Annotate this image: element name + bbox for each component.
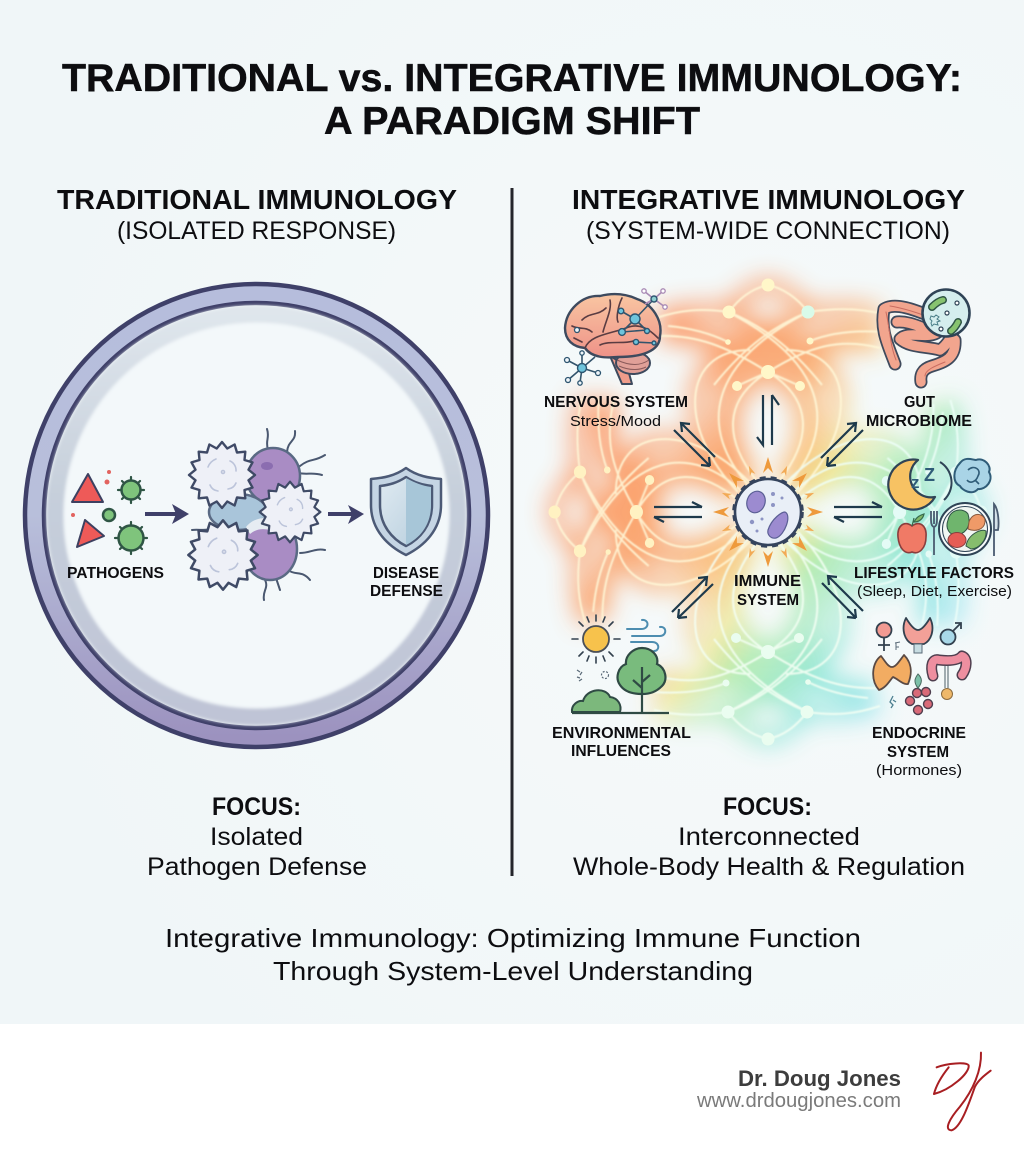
icon: lifestyle factors — [888, 459, 999, 556]
footer credit: www.drdougjones.com — [696, 1090, 901, 1112]
label: environmental influences — [552, 725, 691, 760]
text block: conclusion: Integrative Immunology: Optimizing Immune Function — [165, 923, 861, 953]
label: endocrine system: (Hormones) — [876, 762, 962, 779]
text block: left focus — [147, 793, 367, 881]
icon: pathogens — [71, 470, 147, 554]
label: disease defense: DEFENSE — [370, 583, 443, 600]
text block: conclusion: Through System-Level Understanding — [273, 956, 753, 986]
label: immune system — [734, 573, 801, 609]
text block: right focus: Interconnected — [678, 823, 860, 851]
icon: endocrine system — [873, 618, 966, 714]
arrow: immune cells to defense — [328, 505, 364, 524]
text block: right focus — [573, 793, 965, 881]
label: immune system: IMMUNE — [734, 573, 801, 590]
label: endocrine system: SYSTEM — [887, 744, 949, 761]
label: lifestyle factors: LIFESTYLE FACTORS — [854, 565, 1014, 582]
text block: right focus: FOCUS: — [723, 793, 812, 821]
signature — [934, 1053, 991, 1130]
text block: left focus: Pathogen Defense — [147, 853, 367, 881]
heading: integrative immunology: (SYSTEM-WIDE CONNECTION) — [586, 217, 950, 245]
label: disease defense — [370, 565, 443, 600]
icon: lifestyle factors: z — [911, 473, 920, 492]
icon: gut microbiome — [883, 290, 970, 382]
label: environmental influences: ENVIRONMENTAL — [552, 725, 691, 742]
icon: immune system cell — [713, 457, 823, 567]
label: disease defense: DISEASE — [373, 565, 439, 582]
text block: left focus: FOCUS: — [212, 793, 301, 821]
heading: traditional immunology — [57, 184, 457, 245]
label: nervous system: Stress/Mood — [570, 413, 661, 430]
panel: isolated response ring — [25, 284, 488, 747]
label: pathogens: PATHOGENS — [67, 565, 164, 582]
label: endocrine system: ENDOCRINE — [872, 725, 966, 742]
label: gut microbiome: MICROBIOME — [866, 413, 972, 430]
label: endocrine system — [872, 725, 966, 779]
title: A PARADIGM SHIFT — [324, 100, 700, 143]
arrow: pathogens to immune cells — [145, 504, 189, 524]
title: TRADITIONAL vs. INTEGRATIVE IMMUNOLOGY: — [62, 57, 962, 100]
footer credit — [696, 1066, 901, 1112]
arrows: two-way connections to immune system — [654, 395, 882, 618]
label: nervous system — [544, 394, 688, 430]
icon: environmental influences — [572, 615, 669, 713]
label: nervous system: NERVOUS SYSTEM — [544, 394, 688, 411]
icon: shield — [371, 468, 441, 555]
label: lifestyle factors — [854, 565, 1014, 600]
title — [62, 57, 962, 143]
icon: brain with neurons — [564, 289, 667, 385]
heading: traditional immunology: (ISOLATED RESPONSE) — [117, 217, 396, 245]
label: environmental influences: INFLUENCES — [571, 743, 671, 760]
text block: conclusion — [165, 923, 861, 986]
label: gut microbiome — [866, 394, 972, 430]
icon: lifestyle factors: Z — [924, 465, 935, 485]
footer credit: Dr. Doug Jones — [738, 1066, 901, 1091]
label: lifestyle factors: (Sleep, Diet, Exercise) — [857, 584, 1012, 600]
chart: glowing network — [533, 263, 1000, 759]
heading: traditional immunology: TRADITIONAL IMMUNOLOGY — [57, 184, 457, 215]
icon: immune cells cluster — [188, 429, 325, 600]
label: gut microbiome: GUT — [904, 394, 936, 411]
heading: integrative immunology — [572, 184, 965, 245]
label: immune system: SYSTEM — [737, 592, 799, 609]
footer band — [0, 1024, 1024, 1154]
text block: right focus: Whole-Body Health & Regulation — [573, 853, 965, 881]
text block: left focus: Isolated — [210, 823, 303, 851]
heading: integrative immunology: INTEGRATIVE IMMUNOLOGY — [572, 184, 965, 215]
